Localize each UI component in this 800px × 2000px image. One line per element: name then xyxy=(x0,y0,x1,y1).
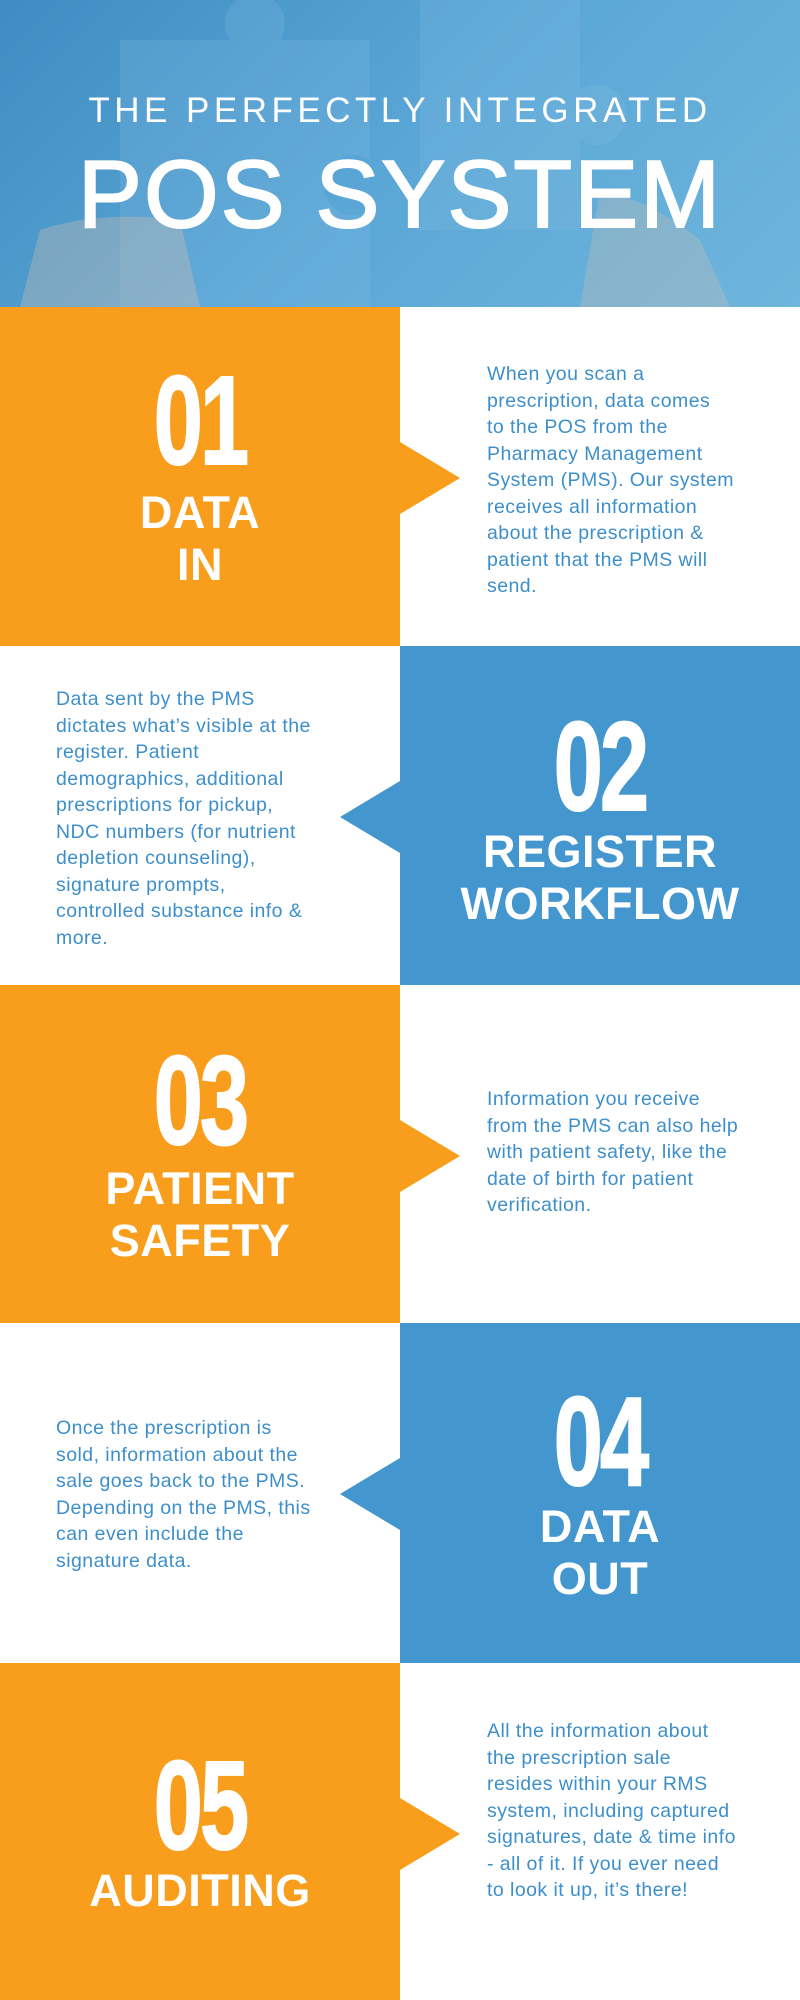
title line 1: THE PERFECTLY INTEGRATED xyxy=(88,91,712,130)
orange block with arrow xyxy=(0,1663,460,2000)
description: dictates what’s visible at the xyxy=(56,714,311,736)
label xyxy=(105,1163,295,1266)
description: system, including captured xyxy=(487,1800,730,1822)
description: controlled substance info & xyxy=(56,900,302,922)
description: Information you receive xyxy=(487,1088,700,1110)
description: register. Patient xyxy=(56,741,199,763)
title line 2: POS SYSTEM xyxy=(78,141,722,248)
label xyxy=(140,487,260,590)
header banner xyxy=(0,0,800,307)
blue block with arrow xyxy=(340,646,800,985)
label: DATA xyxy=(140,487,260,538)
description xyxy=(487,363,734,597)
description: NDC numbers (for nutrient xyxy=(56,820,296,842)
label: REGISTER xyxy=(483,826,717,877)
label: OUT xyxy=(552,1553,648,1604)
number 01: 01 xyxy=(154,350,246,491)
number 03: 03 xyxy=(154,1030,246,1171)
description xyxy=(487,1720,736,1901)
description: date of birth for patient xyxy=(487,1168,693,1190)
label: PATIENT xyxy=(105,1163,295,1214)
description: resides within your RMS xyxy=(487,1773,708,1795)
number 02: 02 xyxy=(554,696,646,837)
section 03: patient safety xyxy=(0,985,738,1323)
section 02: register workflow xyxy=(56,646,800,985)
description: more. xyxy=(56,926,108,948)
label: WORKFLOW xyxy=(461,878,739,929)
orange block with arrow xyxy=(0,985,460,1323)
description: All the information about xyxy=(487,1720,709,1742)
description: verification. xyxy=(487,1194,591,1216)
description: patient that the PMS will xyxy=(487,548,707,570)
label xyxy=(540,1501,660,1604)
description: depletion counseling), xyxy=(56,847,256,869)
description: about the prescription & xyxy=(487,522,704,544)
description: Once the prescription is xyxy=(56,1417,272,1439)
description: sale goes back to the PMS. xyxy=(56,1470,305,1492)
label xyxy=(460,826,739,929)
description: sold, information about the xyxy=(56,1444,298,1466)
label: AUDITING xyxy=(89,1865,311,1916)
label: SAFETY xyxy=(110,1215,290,1266)
section 05: auditing xyxy=(0,1663,736,2000)
description: from the PMS can also help xyxy=(487,1114,738,1136)
description: Data sent by the PMS xyxy=(56,688,255,710)
section 01: data in xyxy=(0,307,734,646)
description: System (PMS). Our system xyxy=(487,469,734,491)
description: signature prompts, xyxy=(56,874,226,896)
description: prescriptions for pickup, xyxy=(56,794,273,816)
description: Pharmacy Management xyxy=(487,442,703,464)
description xyxy=(56,1417,311,1572)
number 05: 05 xyxy=(154,1735,246,1876)
description: receives all information xyxy=(487,496,697,518)
label: DATA xyxy=(540,1501,660,1552)
description: demographics, additional xyxy=(56,768,284,790)
decorative puzzle pieces xyxy=(20,0,730,307)
description: signature data. xyxy=(56,1550,192,1572)
orange block with arrow xyxy=(0,307,460,646)
description: When you scan a xyxy=(487,363,644,385)
description: send. xyxy=(487,575,537,597)
description: the prescription sale xyxy=(487,1746,671,1768)
description: signatures, date & time info xyxy=(487,1826,736,1848)
label: IN xyxy=(177,539,223,590)
description: to the POS from the xyxy=(487,416,668,438)
description: prescription, data comes xyxy=(487,390,710,412)
description xyxy=(487,1088,738,1216)
description xyxy=(56,688,311,948)
number 04: 04 xyxy=(554,1371,646,1512)
blue block with arrow xyxy=(340,1323,800,1663)
description: to look it up, it’s there! xyxy=(487,1879,688,1901)
description: - all of it. If you ever need xyxy=(487,1852,719,1874)
description: can even include the xyxy=(56,1523,244,1545)
description: with patient safety, like the xyxy=(487,1141,727,1163)
description: Depending on the PMS, this xyxy=(56,1496,311,1518)
section 04: data out xyxy=(56,1323,800,1663)
